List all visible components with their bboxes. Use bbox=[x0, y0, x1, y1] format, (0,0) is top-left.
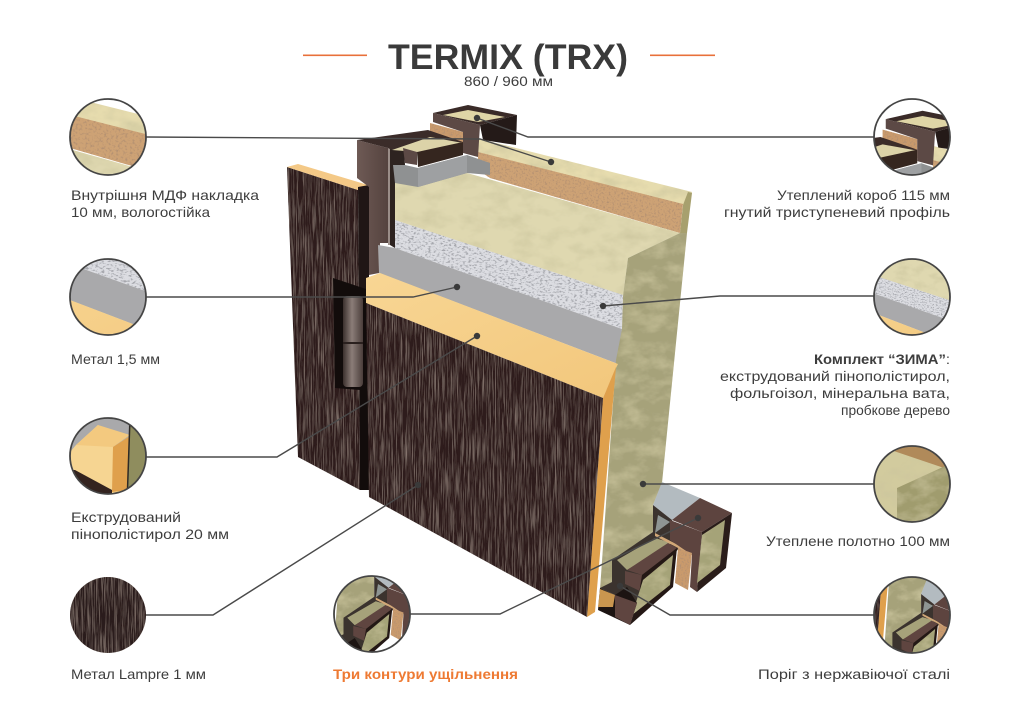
label: metal 1.5: Метал 1,5 мм bbox=[71, 351, 160, 367]
circle: insulated leaf bbox=[874, 440, 950, 522]
label: winter kit: екструдований пінополістирол, bbox=[720, 368, 950, 384]
big box bbox=[670, 520, 702, 592]
main door panel bbox=[366, 303, 603, 617]
foil layer bbox=[395, 220, 623, 329]
small box bbox=[627, 543, 677, 575]
label: inner MDF bbox=[71, 187, 259, 220]
label: winter kit: пробкове дерево bbox=[841, 402, 950, 418]
circle: seal contours bbox=[333, 575, 411, 653]
extruded polystyrene band bbox=[366, 273, 618, 617]
backing behind boxes bbox=[600, 505, 680, 603]
wool side bbox=[600, 233, 687, 590]
leader dots bbox=[415, 115, 701, 589]
circle: insulated box bbox=[873, 98, 951, 176]
door cross-section illustration bbox=[287, 105, 732, 625]
left door leaf bbox=[287, 164, 369, 490]
leader: Lampre metal bbox=[146, 485, 418, 615]
label: insulated box: Утеплений короб 115 мм bbox=[777, 187, 950, 203]
lower step bbox=[598, 587, 637, 625]
wool top bbox=[395, 173, 680, 296]
leader: seal contours bbox=[410, 518, 698, 614]
label: winter kit: фольгоізол, мінеральна вата, bbox=[730, 385, 950, 401]
leader: insulated leaf bbox=[643, 483, 874, 485]
leader: metal 1.5 bbox=[146, 287, 457, 297]
label: seal contours: Три контури ущільнення bbox=[333, 666, 518, 682]
leader: inner MDF bbox=[146, 137, 551, 162]
leader: polystyrene bbox=[146, 336, 477, 457]
label: Lampre metal: Метал Lampre 1 мм bbox=[71, 666, 206, 682]
threshold profiles bbox=[598, 498, 732, 625]
label: winter kit bbox=[720, 351, 950, 418]
steel threshold plate bbox=[653, 482, 700, 520]
upper frame profile bbox=[357, 105, 517, 187]
label: winter kit: Комплект “ЗИМА” : bbox=[814, 351, 950, 367]
leader: winter kit bbox=[603, 296, 874, 306]
label: inner MDF: Внутрішня МДФ накладка bbox=[71, 187, 259, 203]
circle: polystyrene bbox=[70, 418, 146, 496]
label: insulated box bbox=[724, 187, 950, 220]
subtitle: sizes: 860 / 960 мм bbox=[464, 74, 553, 89]
circle: winter kit bbox=[873, 258, 951, 336]
label: inner MDF: 10 мм, вологостійка bbox=[71, 204, 210, 220]
circle: metal 1.5 bbox=[69, 258, 147, 336]
circle: threshold bbox=[873, 576, 951, 654]
label: polystyrene: пінополістирол 20 мм bbox=[71, 526, 229, 542]
circle: inner MDF bbox=[69, 98, 147, 176]
leader: threshold bbox=[620, 586, 874, 615]
hinge recess and hinge bbox=[333, 278, 369, 490]
label: polystyrene: Екструдований bbox=[71, 509, 181, 525]
label: threshold: Поріг з нержавіючої сталі bbox=[758, 666, 950, 682]
title: TERMIX (TRX) bbox=[388, 38, 628, 77]
label: polystyrene bbox=[71, 509, 229, 542]
leader lines bbox=[146, 118, 874, 615]
metal strip bbox=[378, 245, 622, 364]
chipboard strip bbox=[675, 548, 692, 590]
leader: insulated box bbox=[477, 118, 874, 137]
inner MDF overlay bbox=[476, 138, 692, 233]
frame post bbox=[357, 140, 388, 275]
label: insulated box: гнутий триступеневий профіль bbox=[724, 204, 950, 220]
label: insulated leaf: Утеплене полотно 100 мм bbox=[766, 533, 950, 549]
circle: Lampre metal bbox=[70, 577, 146, 653]
